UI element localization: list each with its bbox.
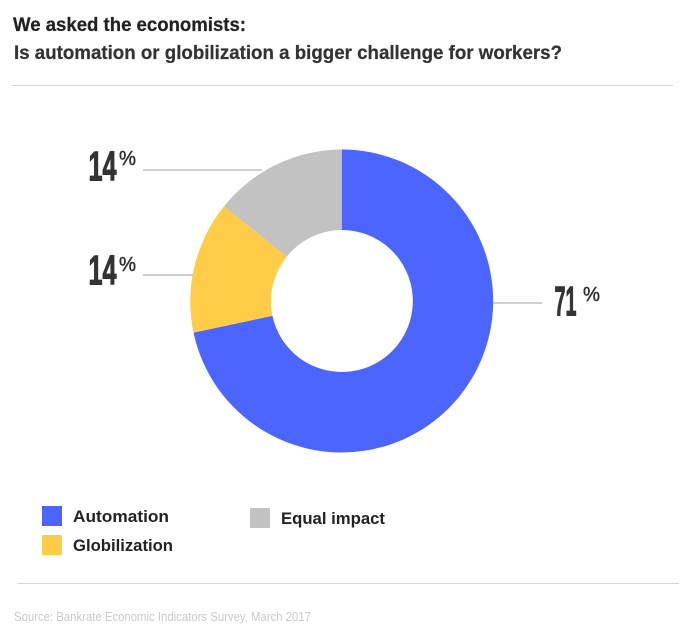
value label: equal impact 14%: % [119, 148, 136, 170]
donut chart [190, 150, 493, 453]
segment: equal impact 14% [224, 150, 342, 257]
value label: globilization 14%: 14 [88, 246, 117, 294]
value label: automation 71%: % [583, 284, 600, 306]
leader line: automation [485, 302, 542, 304]
value label: globilization 14%: % [119, 254, 136, 276]
source note: Source: Bankrate Economic Indicators Survey, March 2017 [14, 610, 311, 624]
value label: equal impact 14%: 14 [88, 142, 117, 190]
legend item: equal impact: Equal impact [281, 509, 385, 528]
title: We asked the economists: [13, 14, 246, 36]
legend [42, 506, 385, 555]
segment: globilization 14% [190, 206, 287, 333]
leader line: equal impact [143, 169, 262, 171]
title [13, 14, 562, 64]
title: Is automation or globilization a bigger challenge for workers? [14, 42, 562, 64]
value label: automation 71%: 71 [554, 278, 576, 324]
segment: automation 71% [194, 150, 493, 453]
legend item: globilization: Globilization [73, 536, 173, 555]
legend item: automation: Automation [73, 507, 169, 526]
leader line: globilization [143, 274, 200, 276]
